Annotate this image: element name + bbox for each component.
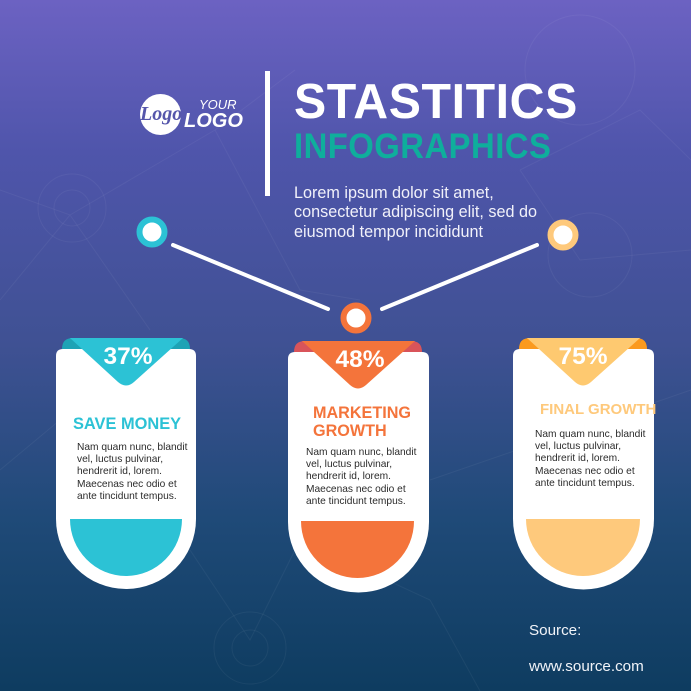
card 2 body: vel, luctus pulvinar,	[306, 459, 392, 470]
card 3 body: hendrerit id, lorem.	[535, 453, 620, 464]
card 3 body: Nam quam nunc, blandit	[535, 429, 645, 440]
card 3 shape	[513, 338, 654, 589]
card 3 body: vel, luctus pulvinar,	[535, 441, 621, 452]
card 1 body	[77, 442, 188, 502]
node yellow	[550, 222, 576, 248]
subtitle: INFOGRAPHICS	[294, 127, 551, 166]
card 2 heading	[313, 404, 411, 440]
card 2 percent: 48%	[335, 346, 385, 373]
source: www.source.com	[529, 658, 644, 675]
card 1 body: ante tincidunt tempus.	[77, 491, 177, 502]
card 3 body: ante tincidunt tempus.	[535, 478, 635, 489]
intro text: consectetur adipiscing elit, sed do	[294, 203, 537, 221]
card 2 heading: MARKETING	[313, 404, 411, 422]
source: Source:	[529, 622, 581, 639]
title divider	[265, 71, 270, 196]
card 2 body: Maecenas nec odio et	[306, 484, 406, 495]
source	[529, 622, 644, 675]
card 1 text	[73, 343, 188, 502]
card 1 percent: 37%	[103, 343, 153, 370]
node teal	[140, 220, 164, 244]
card 1 shape	[56, 338, 196, 589]
connector line left	[173, 245, 328, 309]
card 2 body	[306, 447, 416, 507]
logo wordmark top: YOUR	[199, 97, 237, 112]
intro text: eiusmod tempor incididunt	[294, 223, 483, 241]
logo wordmark bottom: LOGO	[184, 110, 243, 132]
card 3 body: Maecenas nec odio et	[535, 466, 635, 477]
card 3 heading: FINAL GROWTH	[540, 401, 656, 418]
connector line right	[382, 245, 537, 309]
card 1 body: vel, luctus pulvinar,	[77, 454, 163, 465]
logo circle	[140, 94, 181, 135]
card 2 heading: GROWTH	[313, 422, 387, 440]
card 3 percent: 75%	[558, 343, 608, 370]
logo circle: Logo	[140, 103, 182, 125]
card 2 shape	[288, 341, 429, 592]
card 2 body: ante tincidunt tempus.	[306, 496, 406, 507]
card 2 body: hendrerit id, lorem.	[306, 471, 391, 482]
card 1 body: hendrerit id, lorem.	[77, 466, 162, 477]
title: STASTITICS	[294, 75, 578, 129]
card 3 body	[535, 429, 646, 489]
node orange	[344, 306, 368, 330]
card 2 body: Nam quam nunc, blandit	[306, 447, 416, 458]
card 1 body: Maecenas nec odio et	[77, 479, 177, 490]
card 2 text	[306, 346, 416, 507]
intro text	[294, 184, 537, 241]
logo	[140, 94, 243, 135]
intro text: Lorem ipsum dolor sit amet,	[294, 184, 494, 202]
card 3 text	[535, 343, 656, 489]
card 1 body: Nam quam nunc, blandit	[77, 442, 187, 453]
card 1 heading: SAVE MONEY	[73, 415, 181, 433]
